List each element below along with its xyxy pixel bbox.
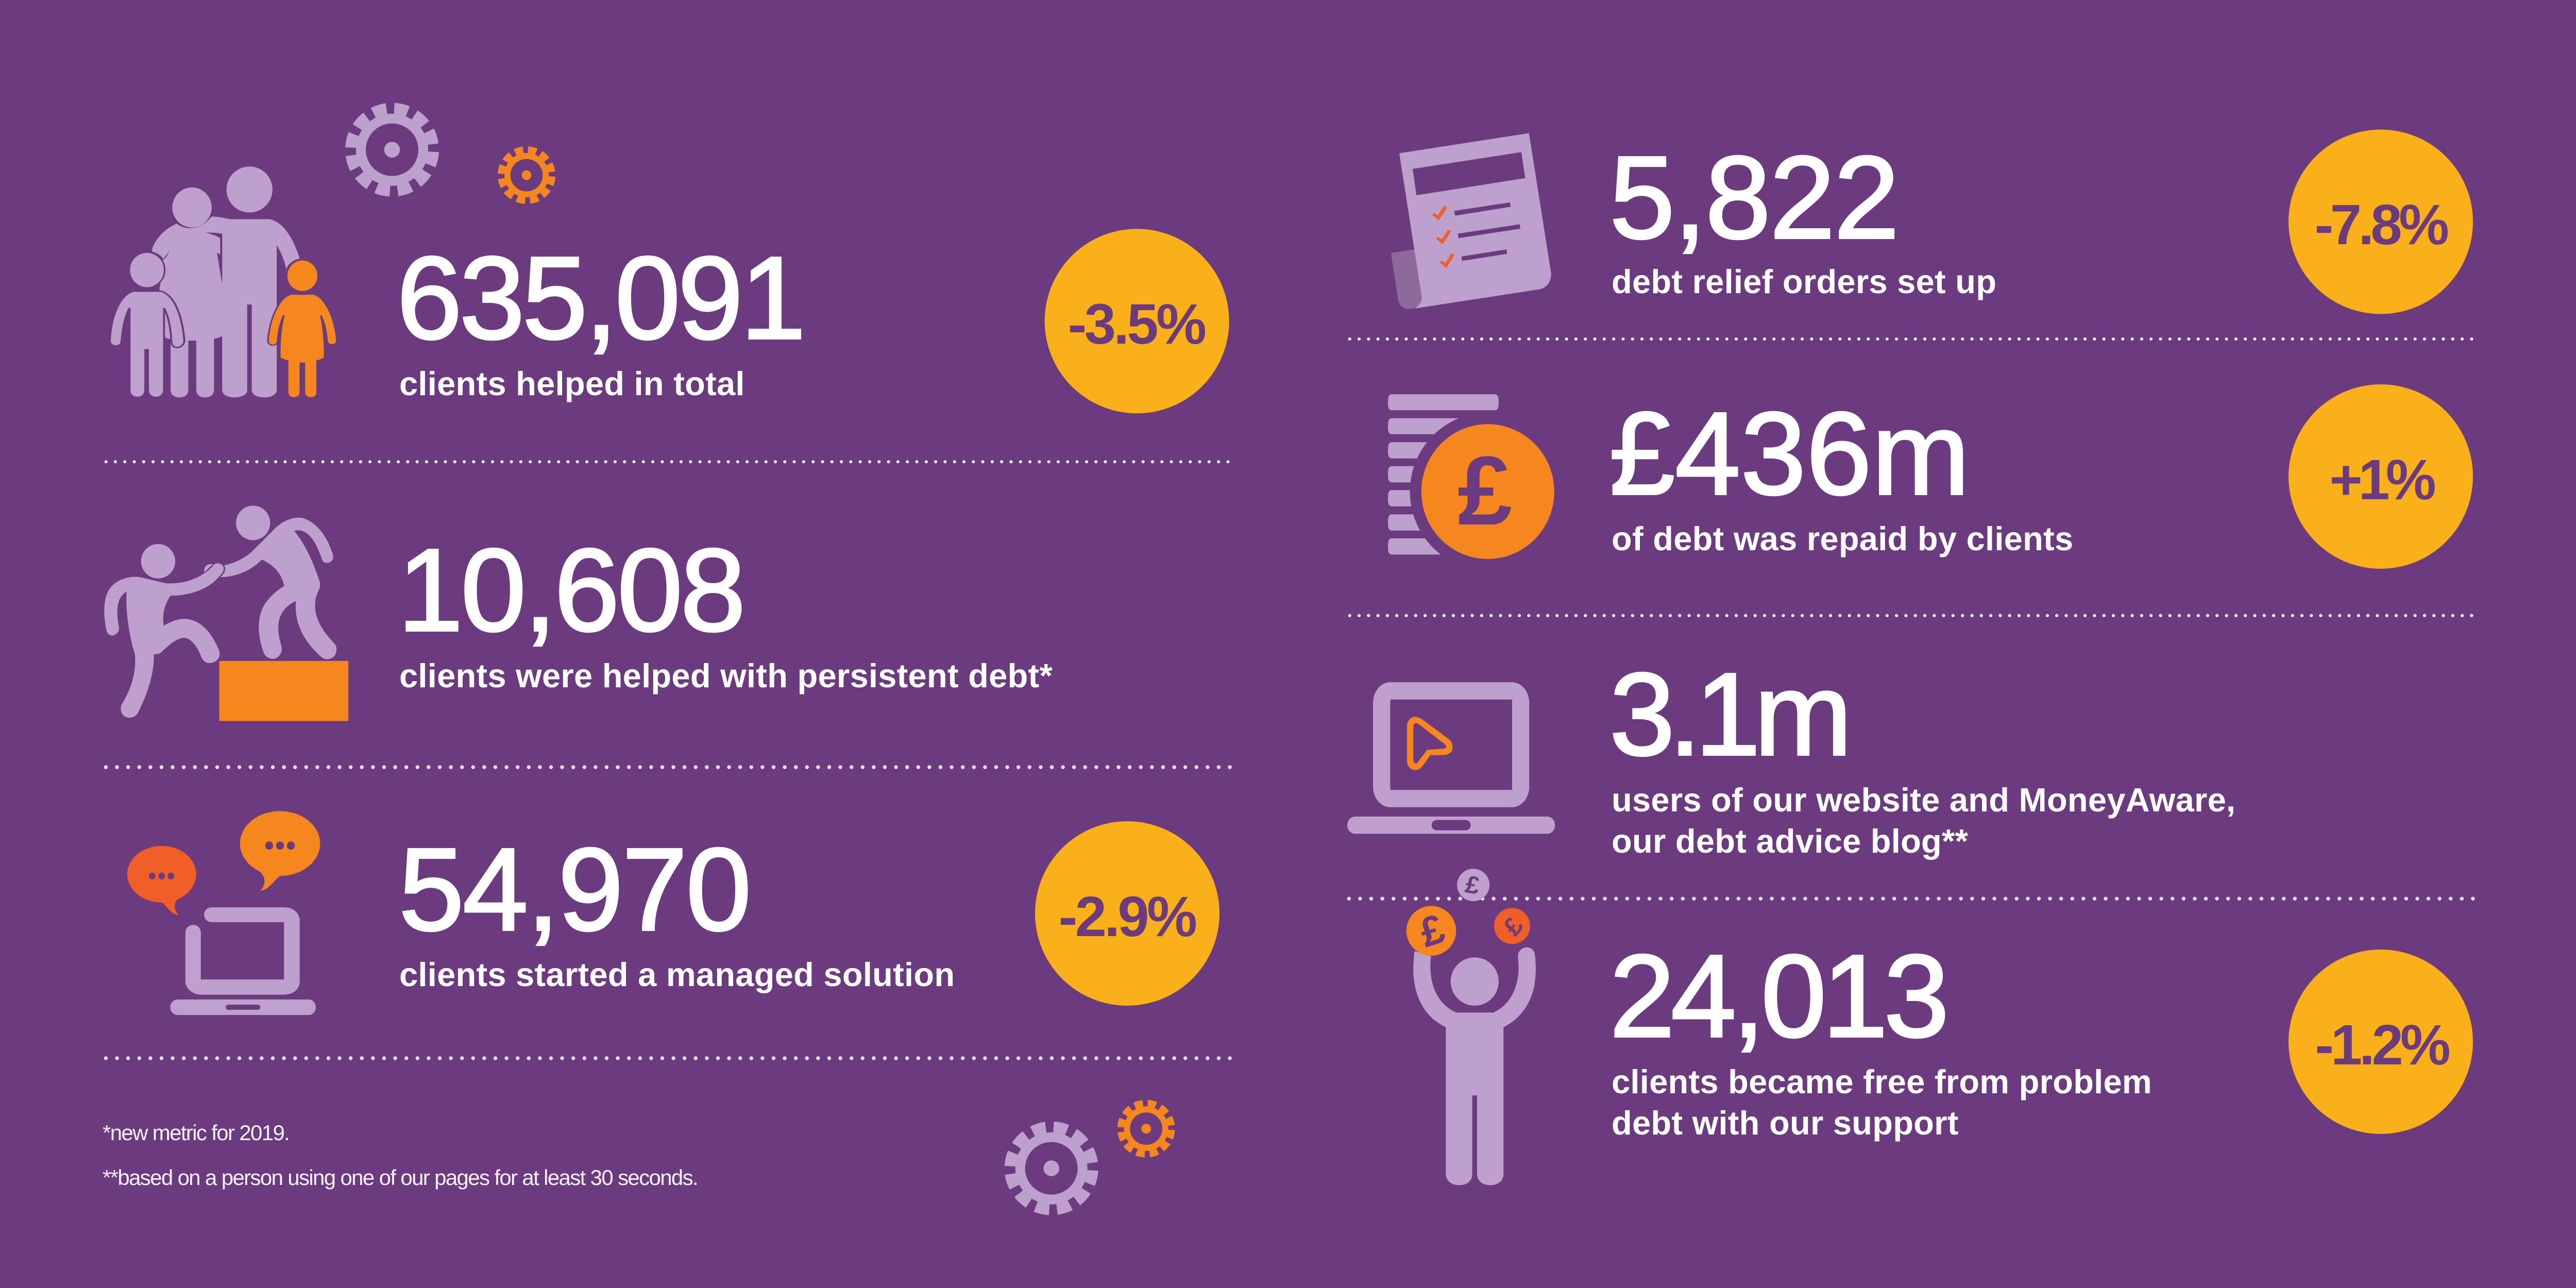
text: of debt was repaid by clients [1609, 388, 2073, 557]
text: users of our website and MoneyAware [1609, 649, 2235, 860]
text: clients became free from problem debt: debt with our support [1612, 1104, 1959, 1142]
icon: person juggling pound coins: £ [1498, 911, 1529, 941]
icon: laptop with speech bubbles [127, 811, 320, 1015]
icon: checklist document [1391, 133, 1551, 309]
text: clients became free from problem debt: clients became free from problem [1612, 1063, 2152, 1100]
text: of debt was repaid by clients: of debt was repaid by clients [1612, 520, 2073, 557]
badge: +1% [2289, 384, 2473, 569]
text: clients started a managed solution: 54,970 [399, 824, 750, 955]
text: clients started a managed solution: clients started a managed solution [399, 956, 955, 993]
badge: -1.2%: -1.2% [2315, 1013, 2449, 1077]
text: clients were helped with persistent debt: 10,608 [398, 525, 743, 656]
icon: family of four [110, 166, 337, 398]
text: clients became free from problem debt [1609, 931, 2152, 1142]
icon: person juggling pound coins: £ [1463, 871, 1482, 900]
badge: -3.5%: -3.5% [1068, 293, 1205, 356]
icon: person juggling pound coins [1406, 869, 1536, 1185]
text: clients were helped with persistent debt: clients were helped with persistent debt* [399, 657, 1053, 694]
badge: -7.8% [2289, 130, 2473, 314]
badge: -2.9%: -2.9% [1059, 885, 1196, 948]
text: clients helped in total: 635,091 [397, 233, 803, 364]
badge: -3.5% [1045, 229, 1229, 413]
badge: -2.9% [1035, 821, 1219, 1006]
footnotes: **based on a person using one of our pages for at least 30 seconds. [103, 1165, 698, 1190]
text: debt relief orders set up: debt relief orders set up [1612, 263, 1996, 300]
icon: person helping another climb onto a box [104, 505, 348, 721]
icon: stack of coins with pound coin: £ [1458, 436, 1512, 546]
text: clients started a managed solution [399, 824, 955, 993]
badge: -7.8%: -7.8% [2315, 193, 2448, 257]
text: users of our website and MoneyAware: 3.1m [1609, 649, 1846, 780]
text: debt relief orders set up: 5,822 [1609, 132, 1899, 263]
text: clients became free from problem debt: 24,013 [1609, 931, 1945, 1062]
footnotes [103, 1121, 698, 1190]
badge: +1%: +1% [2329, 448, 2435, 512]
text: clients were helped with persistent debt [398, 525, 1053, 694]
icon: person juggling pound coins: £ [1415, 905, 1450, 956]
text: debt relief orders set up [1609, 132, 1996, 300]
text: clients helped in total: clients helped in total [399, 365, 745, 402]
text: users of our website and MoneyAware: users of our website and MoneyAware, [1612, 781, 2235, 819]
text: of debt was repaid by clients: £436m [1609, 388, 1970, 519]
text: users of our website and MoneyAware: our debt advice blog** [1612, 822, 1969, 860]
footnotes: *new metric for 2019. [103, 1121, 289, 1145]
icon: small orange gear bottom [1120, 1102, 1173, 1156]
icon: small orange gear top [500, 148, 553, 202]
icon: large lilac gear bottom [1008, 1125, 1095, 1212]
icon: laptop with cursor [1347, 682, 1555, 834]
badge: -1.2% [2289, 950, 2473, 1134]
icon: large lilac gear top [349, 106, 435, 193]
icon: stack of coins with pound coin [1388, 394, 1566, 570]
